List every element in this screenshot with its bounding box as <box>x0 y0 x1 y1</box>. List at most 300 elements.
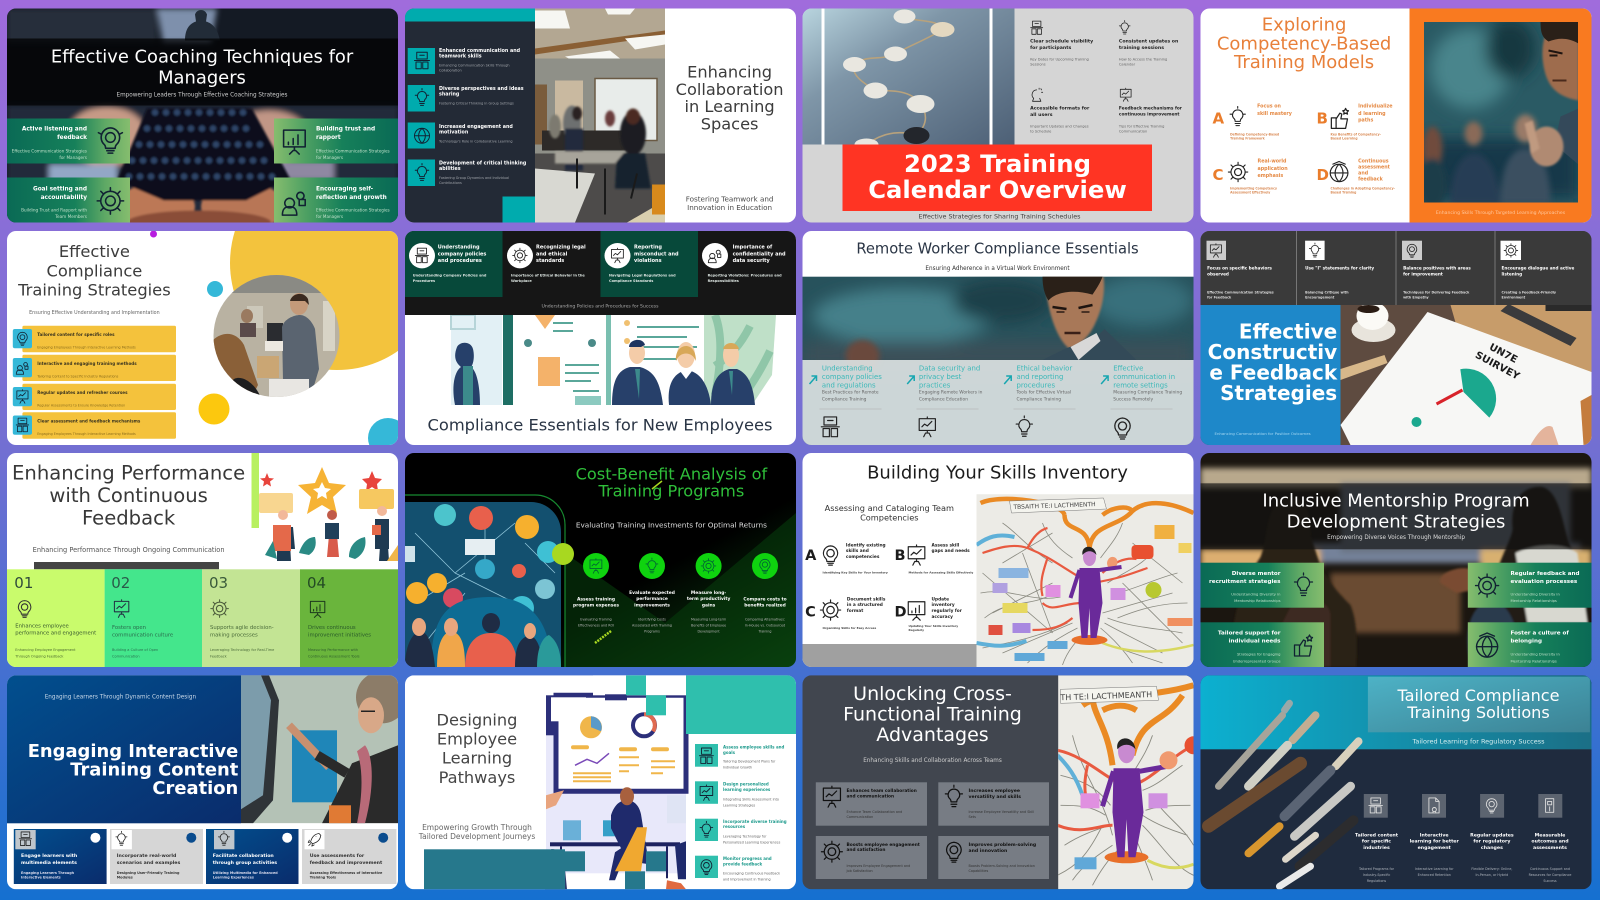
item: confidentiality <box>702 243 786 283</box>
tile: multimedia: multimedia elements <box>21 860 77 866</box>
blue title panel: Strategies <box>1220 381 1337 405</box>
item D: accuracy <box>932 614 953 620</box>
lime oval <box>552 481 662 643</box>
panel: active listening <box>7 118 130 164</box>
subtitle: Enhancing Skills and Collaboration Across Teams <box>863 758 1002 764</box>
box: versatility: versatility and skills <box>968 794 1021 800</box>
tile: assessments <box>302 829 396 884</box>
item: consistent updates <box>1119 20 1178 66</box>
subtitle: Tailored Learning for Regulatory Success <box>1411 737 1545 745</box>
item: policies: Understanding Company Policies and <box>413 274 486 278</box>
bar: tailored content: Tailored content for specific roles <box>37 332 115 337</box>
item: reporting: Compliance Standards <box>609 279 653 283</box>
tile: assessments: feedback and improvement <box>310 860 383 866</box>
column 04 <box>300 569 398 667</box>
title band: Managers <box>158 68 246 88</box>
item A: Training Framework <box>1230 136 1266 140</box>
panel: goal setting: accountability <box>41 195 87 201</box>
column: data security: Engaging Remote Workers in <box>919 391 982 396</box>
column: tailored content: Regulations <box>1367 879 1386 883</box>
item: critical thinking <box>408 160 527 186</box>
tile: multimedia: Engaging Learners Through <box>21 871 74 875</box>
slide: Cost-Benefit Analysis of Training Programs <box>405 453 796 667</box>
panel: tailored support <box>1200 622 1324 667</box>
panel: evaluation <box>1468 563 1592 608</box>
item: specific behaviors: Focus on specific behaviors <box>1207 265 1272 270</box>
dark green wedge <box>565 513 796 667</box>
item: compare costs: Comparing Alternatives: <box>745 618 785 622</box>
panel: recruitment: recruitment strategies <box>1209 579 1281 585</box>
item: I statements: Balancing Critique with <box>1305 290 1349 294</box>
grey footer bar <box>802 644 976 667</box>
column: interactive learning: engagement <box>1418 845 1452 851</box>
item: diverse resources: Leveraging Technology for <box>723 835 766 839</box>
title band: Empowering Diverse Voices Through Mentorship <box>1327 535 1465 541</box>
box: collaboration <box>816 782 927 826</box>
item B: Key Benefits of Competency- <box>1330 132 1381 136</box>
blue title panel: e Feedback <box>1209 360 1338 384</box>
bar: assessment: Engaging Employees Through Interactive Learning Methods <box>37 432 136 436</box>
item C: Implementing Competency <box>1230 186 1277 190</box>
box: versatility: Sets <box>968 815 976 819</box>
column: ethical behavior: Tools for Effective Virtual <box>1016 391 1071 396</box>
item C: C <box>1212 166 1224 184</box>
dark bar <box>34 562 219 569</box>
bar: regular updates <box>13 384 176 410</box>
item: compare costs <box>743 553 787 634</box>
box: problem solving: Capabilities <box>968 869 989 873</box>
title: Training Models <box>1233 52 1374 73</box>
slide: Inclusive Mentorship Program Development Strategies <box>1200 453 1592 667</box>
item A: Identify existing <box>846 544 886 548</box>
title: Feedback <box>82 506 176 530</box>
photo: serious man <box>802 276 1194 447</box>
panel: belonging: Foster a culture of <box>1510 630 1569 636</box>
item: assess skills: Tailoring Development Plans for <box>723 760 775 764</box>
item D: Updating Your Skills Inventory <box>908 624 958 628</box>
tile: real-world: Incorporate real-world <box>117 854 176 859</box>
panel: recruitment <box>1200 563 1324 608</box>
tile: assessments: Use assessments for <box>310 854 364 859</box>
photo: hands holding pawns <box>7 8 398 234</box>
illustration: learning network <box>405 495 565 667</box>
orange panel <box>1410 8 1592 222</box>
item: balance positives: with Empathy <box>1403 295 1430 299</box>
panel: tailored support: Underrepresented Groups <box>1233 660 1281 664</box>
title: Learning <box>442 748 512 767</box>
item: dialogue: listening <box>1502 272 1522 277</box>
item: critical thinking: Development of critical thinking <box>439 162 526 166</box>
slide: Remote Worker Compliance Essentials <box>802 231 1194 447</box>
item: accessible formats: Important Updates and Changes <box>1030 124 1089 128</box>
item: legal: Importance of Ethical Behavior in the <box>511 274 585 278</box>
panel: goal setting: Goal setting and <box>33 186 87 192</box>
column 02: communication culture <box>112 633 173 639</box>
column: remote communication: remote settings <box>1113 382 1168 390</box>
item A <box>1212 104 1293 140</box>
item D: inventory <box>932 602 955 608</box>
title band <box>7 38 398 106</box>
panel: tailored support: individual needs <box>1229 638 1281 644</box>
column 01 <box>7 569 105 667</box>
item D: Based Training <box>1330 190 1356 194</box>
panel: active listening: for Managers <box>59 155 87 160</box>
column 03: 03 <box>209 574 228 592</box>
subtitle: Ensuring Adherence in a Virtual Work Environment <box>925 266 1070 272</box>
title: Cost-Benefit Analysis of <box>576 464 767 484</box>
item A: Identifying Key Skills for Your Inventory <box>822 570 888 574</box>
panel: building trust: for Managers <box>316 155 343 160</box>
column: ethical behavior: and reporting <box>1016 373 1063 381</box>
item B: Assess skill <box>932 544 959 548</box>
item: communication: teamwork skills <box>439 54 482 60</box>
top band: Understanding Policies and Procedures for Success <box>541 304 659 310</box>
column: remote communication: communication in <box>1113 373 1175 381</box>
item: expenses: Evaluating Training <box>580 618 612 622</box>
panel: evaluation: Mentorship Relationships <box>1510 599 1557 603</box>
photo: desk with survey <box>1200 231 1592 445</box>
column: interactive learning: learning for better <box>1410 839 1460 845</box>
item: perspectives: sharing <box>439 92 460 98</box>
box: problem solving <box>938 836 1049 879</box>
box: problem solving: and innovation <box>968 848 1007 854</box>
panel: goal setting <box>7 178 130 222</box>
item: productivity <box>687 553 730 634</box>
item: consistent updates: How to Access the Training <box>1119 58 1167 62</box>
box: versatility: Increase Employee Versatility and Skill <box>968 810 1034 814</box>
blue title panel <box>1200 305 1340 445</box>
slide: Effective Coaching Techniques for Managers <box>7 8 398 234</box>
photo: pebble path <box>802 8 1014 150</box>
item: monitor progress: Encouraging Continuous Feedback <box>723 871 780 875</box>
title: Advantages <box>876 724 989 746</box>
column: tailored content: Tailored content <box>1355 833 1398 838</box>
item: reporting: misconduct and <box>634 251 679 257</box>
item: balance positives: Balance positives with areas <box>1403 265 1471 270</box>
column: data security: practices <box>919 382 951 390</box>
item: feedback mechanisms: continuous improvement <box>1119 112 1179 118</box>
title: with Continuous <box>49 484 208 507</box>
item: feedback mechanisms: Communication <box>1119 130 1147 134</box>
panel: building trust: Effective Communication Strategies <box>316 148 390 154</box>
item: assess skills: Individual Growth <box>723 766 752 770</box>
column: regular updates: Regular updates <box>1470 833 1514 838</box>
item: personalized: Integrating Skills Assessment into <box>723 797 779 801</box>
decorative dots <box>150 230 408 458</box>
bar: tailored content: Engaging Employees Through Interactive Learning Methods <box>37 346 136 350</box>
item: I statements: Encouragement <box>1305 295 1335 299</box>
subtitle: Ensuring Effective Understanding and Implementation <box>29 310 160 316</box>
illustration: office team <box>451 315 776 405</box>
column 02 <box>105 569 202 667</box>
teal accents <box>626 675 796 734</box>
column: ethical behavior <box>1004 365 1076 436</box>
illustration: analyst at dashboard <box>545 675 686 889</box>
bar: interactive methods: Tailoring Content to Specific Industry Regulations <box>36 374 119 378</box>
item: policies: Understanding <box>438 244 480 250</box>
title box: Calendar Overview <box>868 175 1127 204</box>
column: tailored content: for specific <box>1362 839 1391 845</box>
item: confidentiality: Reporting Violations: Procedures and <box>708 274 782 278</box>
item: productivity: Benefits of Employee <box>691 624 726 628</box>
subtitle: Fostering Teamwork and <box>686 194 774 204</box>
item D: regularly for <box>932 608 963 614</box>
item A: A <box>1212 110 1224 128</box>
item: confidentiality: confidentiality and <box>733 251 786 257</box>
subtitle: Competencies <box>860 512 919 522</box>
item B: B <box>894 548 906 564</box>
item: consistent updates: Calendar <box>1119 62 1136 66</box>
panel: goal setting: Team Members <box>54 214 87 219</box>
item: assess skills <box>695 744 784 770</box>
item: critical thinking: Contributions <box>439 181 462 185</box>
item A: skills and <box>846 548 869 554</box>
item: consistent updates: training sessions <box>1119 45 1164 51</box>
panel: evaluation: Understanding Diversity in <box>1510 592 1560 596</box>
column: measurable outcomes <box>1529 794 1571 883</box>
tile: collaboration: Facilitate collaboration <box>213 854 274 859</box>
column 01: Enhances employee <box>15 624 69 630</box>
item C <box>805 596 886 630</box>
box: collaboration: and communication <box>846 793 894 799</box>
title band: Effective Coaching Techniques for <box>51 46 353 68</box>
item: expenses: Effectiveness and ROI <box>578 624 614 628</box>
panel: evaluation: Regular feedback and <box>1510 571 1580 577</box>
item: improvements: Associated with Training <box>632 624 672 628</box>
column: measurable outcomes: Success <box>1543 879 1557 883</box>
panel: belonging: belonging <box>1510 638 1542 644</box>
mind map image <box>1058 675 1202 889</box>
box: versatility <box>938 782 1049 826</box>
subtitle: Effective Strategies for Sharing Training Schedules <box>919 212 1081 220</box>
title: in Learning <box>685 97 775 116</box>
item: I statements: Use "I" statements for clarity <box>1305 265 1374 270</box>
column: measurable outcomes: assessments <box>1533 845 1567 851</box>
title: Collaboration <box>676 80 784 99</box>
column 01: Through Ongoing Feedback <box>14 654 64 658</box>
item: improvements <box>629 553 675 634</box>
column: interactive learning: Enhanced Retention <box>1418 873 1451 877</box>
item D: Update <box>932 598 949 602</box>
slide: Unlocking Cross-Functional Training Advantages <box>802 675 1202 889</box>
bar: assessment <box>13 412 176 439</box>
slide: Compliance Essentials for New Employees <box>405 231 796 445</box>
title band: Empowering Leaders Through Effective Coaching Strategies <box>117 92 287 98</box>
panel: building trust <box>274 118 398 164</box>
title box <box>842 144 1152 211</box>
item A: skill mastery <box>1257 111 1293 117</box>
item: diverse resources: resources <box>723 824 746 829</box>
item: consistent updates: Consistent updates on <box>1119 40 1178 44</box>
column: policies: company policies <box>822 373 882 381</box>
title band <box>1200 483 1592 549</box>
column 01: 01 <box>14 574 33 592</box>
item: communication: Enhanced communication and <box>439 49 520 54</box>
item: legal: and ethical <box>536 251 568 257</box>
item: engagement: Increased engagement and <box>439 125 513 130</box>
item: engagement: Technology's Role in Collaborative Learning <box>438 140 513 144</box>
subtitle: Tailored Development Journeys <box>418 832 535 841</box>
item: specific behaviors <box>1206 241 1274 299</box>
box: engagement: Improves Employee Engagement and <box>846 864 910 868</box>
item B: Based Learning <box>1330 136 1358 140</box>
item C: C <box>805 605 816 621</box>
blue title panel: Creation <box>152 778 238 799</box>
column 04: improvement initiatives <box>308 633 371 639</box>
title: Enhancing <box>687 62 772 82</box>
item: diverse resources: Personalized Learning Experiences <box>723 840 781 844</box>
item C: Document skills <box>847 598 885 602</box>
item D: Continuous <box>1358 160 1389 164</box>
slide: Effective Compliance Training Strategies <box>7 231 398 445</box>
box: engagement: Job Satisfaction <box>846 869 873 873</box>
box: collaboration: Enhances team collaboration <box>846 789 917 794</box>
slide: Exploring Competency-Based Training Models <box>1200 8 1592 222</box>
title: Training Programs <box>598 482 744 500</box>
column: data security: Compliance Education <box>919 397 968 403</box>
column: tailored content: industries <box>1363 845 1390 851</box>
column 02: Communication <box>112 654 140 658</box>
tile: multimedia <box>14 829 107 884</box>
box: problem solving: Boosts Problem-Solving and Innovation <box>968 864 1035 868</box>
title panel: Training Solutions <box>1406 703 1550 722</box>
item: compare costs: In-House vs. Outsourced <box>745 624 785 628</box>
panel: encouraging reflection: for Managers <box>316 214 343 219</box>
column: remote communication <box>1101 365 1182 439</box>
slide: Designing Employee Learning Pathways <box>405 675 796 889</box>
illustration: people and star <box>259 467 398 561</box>
item: improvements: improvements <box>634 603 670 609</box>
title box: 2023 Training <box>904 149 1091 178</box>
item: specific behaviors: observed <box>1207 272 1229 277</box>
item D: Challenges in Adopting Competency- <box>1330 186 1395 190</box>
blue title panel: Engaging Learners Through Dynamic Content Design <box>45 694 196 700</box>
item: productivity: Development <box>697 630 720 634</box>
bar: assessment: Clear assessment and feedback mechanisms <box>37 418 141 424</box>
bar: interactive methods: Interactive and engaging training methods <box>37 361 137 366</box>
item: dialogue: Environment <box>1502 295 1526 299</box>
item: reporting <box>604 243 679 283</box>
item: communication <box>408 48 521 74</box>
photo: woman at screen <box>241 671 408 823</box>
item: monitor progress: Monitor progress and <box>723 856 772 861</box>
title: Competency-Based <box>1217 34 1391 54</box>
item: dialogue: Encourage dialogue and active <box>1502 265 1574 270</box>
title: Compliance <box>46 262 142 280</box>
item: perspectives: Fostering Critical Thinking in Group Settings <box>439 102 514 106</box>
bar: interactive methods <box>13 355 176 381</box>
item: improvements: Evaluate expected <box>629 591 675 596</box>
mind map image <box>976 494 1194 667</box>
panel: building trust: rapport <box>316 135 341 141</box>
photo: desk with survey: SUIRVEY <box>1473 350 1522 383</box>
panel: goal setting: Building Trust and Rapport with <box>21 208 87 212</box>
item B: Individualize <box>1358 104 1393 110</box>
slide: Tailored Compliance Training Solutions <box>1200 675 1592 889</box>
item: policies <box>409 243 487 283</box>
item: critical thinking: abilities <box>439 166 461 172</box>
item: critical thinking: Fostering Group Dynamics and Individual <box>439 176 509 180</box>
item: accessible formats <box>1030 88 1090 134</box>
blue title panel: Engaging Interactive <box>28 741 238 762</box>
item B <box>1316 104 1393 140</box>
subtitle: Empowering Growth Through <box>422 823 532 832</box>
box: problem solving: Improves problem-solving <box>968 843 1036 848</box>
item: accessible formats: to Schedule <box>1030 130 1052 134</box>
item: personalized: Design personalized <box>723 782 769 787</box>
item: confidentiality: data security <box>733 258 771 264</box>
column: regular updates: for regulatory <box>1473 839 1510 845</box>
item C: emphasis <box>1258 173 1283 179</box>
title: Spaces <box>701 114 758 134</box>
column: interactive learning: Interactive Learning for <box>1415 867 1454 871</box>
column: regular updates: Flexible Delivery: Online, <box>1471 867 1512 871</box>
subtitle: Evaluating Training Investments for Optimal Returns <box>576 520 767 530</box>
item: confidentiality: Importance of <box>733 244 772 250</box>
item: schedule visibility <box>1030 21 1093 67</box>
item: feedback mechanisms: Feedback mechanisms for <box>1119 106 1182 112</box>
item C: format <box>847 608 863 614</box>
item: productivity: Measuring Long-term <box>691 618 726 622</box>
title: Enhancing Performance <box>12 462 245 484</box>
column: ethical behavior: Compliance Training <box>1016 397 1061 403</box>
item: schedule visibility: Clear schedule visibility <box>1030 40 1093 44</box>
item D: and <box>1358 170 1369 176</box>
tile: multimedia: Interactive Elements <box>21 876 61 880</box>
panel: evaluation: evaluation processes <box>1510 579 1578 585</box>
item D: D <box>1316 166 1329 184</box>
panel: encouraging reflection: reflection and growth <box>316 195 387 201</box>
photo: trainer in circle <box>214 275 340 397</box>
subtitle: Innovation in Education <box>687 203 772 212</box>
slide: Effective Constructive Feedback Strategies <box>1200 231 1592 445</box>
item: balance positives <box>1402 241 1471 299</box>
panel: tailored support: Tailored support for <box>1218 630 1280 636</box>
item: productivity: gains <box>702 603 716 609</box>
item: personalized: Learning Strategies <box>723 803 755 807</box>
item B: B <box>1316 110 1328 128</box>
decorative yellow blob <box>230 231 398 370</box>
tile: collaboration: Learning Experiences <box>213 876 254 880</box>
box: engagement: Boosts employee engagement <box>846 843 920 848</box>
box: engagement <box>816 836 927 879</box>
panel: belonging <box>1468 622 1592 667</box>
photo: man pointing <box>1418 18 1578 208</box>
panel: belonging: Understanding Diversity in <box>1510 652 1560 656</box>
item A: A <box>805 548 817 564</box>
dark sidebar with teal accents <box>405 8 535 222</box>
panel: active listening: Active listening and <box>22 126 87 132</box>
item: policies: company policies <box>438 251 486 257</box>
item: expenses: program expenses <box>573 603 619 609</box>
column: tailored content: Industry-Specific <box>1363 873 1390 877</box>
box: collaboration: Communication <box>846 815 873 819</box>
item: compare costs: Training <box>757 630 772 634</box>
item: personalized: learning experiences <box>723 787 771 792</box>
tile: collaboration: through group activities <box>213 860 277 866</box>
bar: regular updates: Regular updates and refresher courses <box>37 390 128 395</box>
item: I statements <box>1305 241 1374 299</box>
column: regular updates: changes <box>1481 845 1503 851</box>
panel: encouraging reflection <box>274 178 398 222</box>
item: policies: and procedures <box>438 258 482 264</box>
item C: Real-world <box>1258 160 1286 164</box>
bar: tailored content <box>13 326 176 352</box>
top dark band <box>1200 231 1592 305</box>
slide: Enhancing Collaboration in Learning Spaces <box>405 8 796 222</box>
column 03 <box>202 569 300 667</box>
title: Compliance Essentials for New Employees <box>427 416 773 434</box>
